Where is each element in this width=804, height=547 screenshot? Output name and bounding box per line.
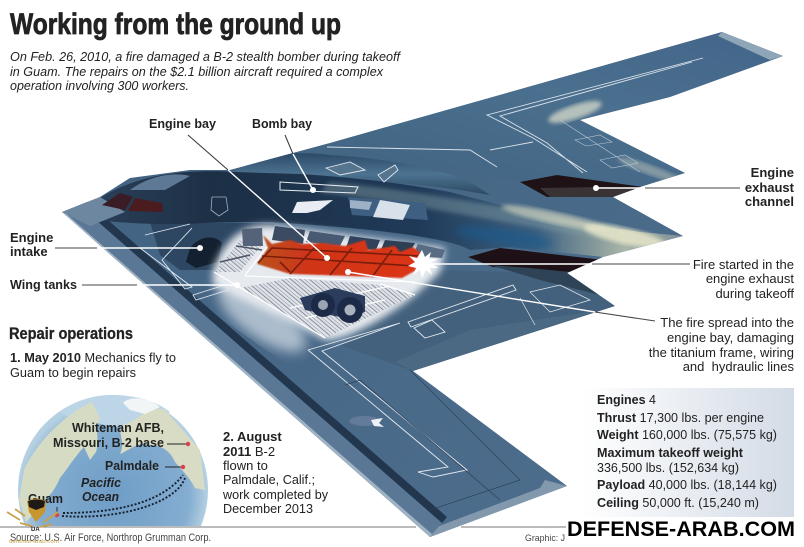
specs panel: Engines 4 — [597, 392, 656, 407]
upper wing panel lines — [327, 58, 703, 173]
leader: engine intake — [55, 245, 203, 251]
graphic credit: Graphic: J — [525, 533, 565, 544]
specs panel: Payload 40,000 lbs. (18,144 kg) — [597, 477, 777, 492]
exhaust channel lower — [468, 248, 603, 272]
label: bomb bay: Bomb bay — [252, 116, 313, 131]
label: engine exhaust channel: channel — [745, 194, 794, 209]
ocean — [18, 395, 208, 526]
fuselage — [80, 171, 683, 257]
location markers — [55, 442, 190, 517]
intro text: in Guam. The repairs on the $2.1 billion aircraft required a complex — [10, 64, 383, 79]
watermark text: DEFENSE-ARAB.COM — [567, 518, 795, 541]
label: engine intake: Engine — [10, 230, 53, 245]
wing highlight — [546, 97, 604, 127]
map labels: Ocean — [82, 489, 119, 504]
leader: bomb bay — [285, 135, 316, 193]
step 2 text: December 2013 — [223, 501, 313, 516]
label: fire started — [693, 257, 794, 301]
second bay — [348, 197, 428, 220]
watermark logo: DA — [31, 527, 40, 533]
leader: fire spread — [345, 269, 655, 321]
lower wing tip edge — [426, 480, 567, 537]
fire — [257, 235, 424, 278]
intro text: operation involving 300 workers. — [10, 78, 189, 93]
step 1 text — [10, 350, 176, 380]
label: engine exhaust channel: exhaust — [745, 180, 795, 195]
label: engine bay: Engine bay — [149, 116, 217, 131]
watermark logo: defense-arab.com — [9, 539, 59, 545]
watermark logo — [7, 499, 59, 545]
engine ducts row — [242, 228, 263, 246]
heading: repair operations: Repair operations — [9, 324, 133, 343]
intake — [186, 238, 222, 268]
squadron emblem — [211, 197, 228, 216]
map labels: Pacific — [81, 475, 122, 490]
step 1 text: 1. May 2010 Mechanics fly to — [10, 350, 176, 365]
wing star insignia — [349, 416, 384, 427]
bomb bay doors — [292, 200, 333, 213]
specs panel: Weight 160,000 lbs. (75,575 kg) — [597, 427, 777, 442]
white wash under bay — [211, 286, 313, 360]
specs panel: 336,500 lbs. (152,634 kg) — [597, 460, 739, 475]
leading edge dark stripe — [72, 193, 447, 523]
cream fuselage band — [500, 202, 607, 231]
specs panel: Maximum takeoff weight — [597, 445, 744, 460]
label: fire started: engine exhaust — [706, 271, 794, 286]
step 2 text: flown to — [223, 458, 268, 473]
leader lines — [57, 444, 187, 515]
blue fuselage wash — [458, 226, 556, 251]
leader: engine exhaust channel — [593, 185, 740, 191]
leading edge light band — [60, 210, 432, 537]
label: fire spread: the titanium frame, wiring — [649, 345, 794, 360]
label: fire started: during takeoff — [715, 286, 794, 301]
top tube fairing — [235, 153, 490, 195]
label: engine intake — [10, 230, 53, 259]
label: engine exhaust channel — [745, 165, 795, 209]
cockpit window left — [102, 193, 133, 210]
intake fairing — [150, 222, 275, 270]
mid trailing wing — [340, 270, 615, 371]
source credit: Source: U.S. Air Force, Northrop Grumman Corp. — [10, 532, 211, 544]
wing tip edge — [718, 32, 783, 60]
specs panel: Thrust 17,300 lbs. per engine — [597, 410, 764, 425]
engine bay cutaway — [213, 225, 445, 340]
step 2 text: work completed by — [222, 487, 328, 502]
routes — [62, 475, 185, 517]
landing gear wheels — [300, 288, 365, 323]
label: engine intake: intake — [10, 244, 48, 259]
map labels: Palmdale — [105, 458, 159, 473]
intro text — [10, 49, 401, 93]
step 2 text: 2011 B-2 — [223, 444, 275, 459]
tail highlight — [582, 222, 666, 248]
map labels: Guam — [28, 491, 63, 506]
label: fire started: Fire started in the — [693, 257, 794, 272]
frame white lines — [214, 247, 415, 338]
bottom rule — [0, 526, 566, 528]
specs panel — [582, 388, 794, 517]
fuselage sheen — [320, 182, 620, 238]
nose panel — [62, 197, 125, 226]
upper wing surface — [230, 32, 783, 187]
lattice — [240, 278, 415, 338]
Greenland — [123, 398, 160, 414]
intro text: On Feb. 26, 2010, a fire damaged a B-2 stealth bomber during takeoff — [10, 49, 401, 64]
land: Asia — [19, 402, 100, 522]
map labels: Whiteman AFB, — [72, 420, 164, 435]
leader: wing tanks — [82, 282, 240, 288]
specs panel: Ceiling 50,000 ft. (15,240 m) — [597, 495, 759, 510]
leading edge strip — [62, 199, 442, 534]
leader: fire started — [430, 263, 690, 265]
step 2 text: 2. August — [223, 429, 282, 444]
label: fire spread: and hydraulic lines — [683, 359, 794, 374]
label: fire spread: The fire spread into the — [660, 315, 794, 330]
step 2 text: Palmdale, Calif.; — [223, 472, 315, 487]
leader: engine bay — [188, 135, 330, 261]
exhaust channel upper — [520, 175, 643, 197]
label: fire spread: engine bay, damaging — [667, 330, 794, 345]
globe map — [18, 395, 208, 526]
step 2 text — [222, 429, 328, 516]
arctic — [60, 395, 170, 427]
step 1 text: Guam to begin repairs — [10, 365, 136, 380]
lower wing panel lines — [308, 285, 516, 477]
map labels — [28, 420, 164, 506]
label: engine exhaust channel: Engine — [751, 165, 794, 180]
label: wing tanks: Wing tanks — [10, 277, 77, 292]
bomb bay panel — [280, 182, 358, 193]
cockpit window right — [128, 198, 163, 212]
label: fire spread — [649, 315, 794, 374]
land: North America — [120, 409, 205, 490]
title: Working from the ground up — [10, 8, 341, 41]
fire structure lines — [258, 247, 420, 277]
map labels: Missouri, B-2 base — [53, 435, 164, 450]
fire flash — [408, 250, 438, 278]
canopy top sheen — [130, 174, 190, 190]
